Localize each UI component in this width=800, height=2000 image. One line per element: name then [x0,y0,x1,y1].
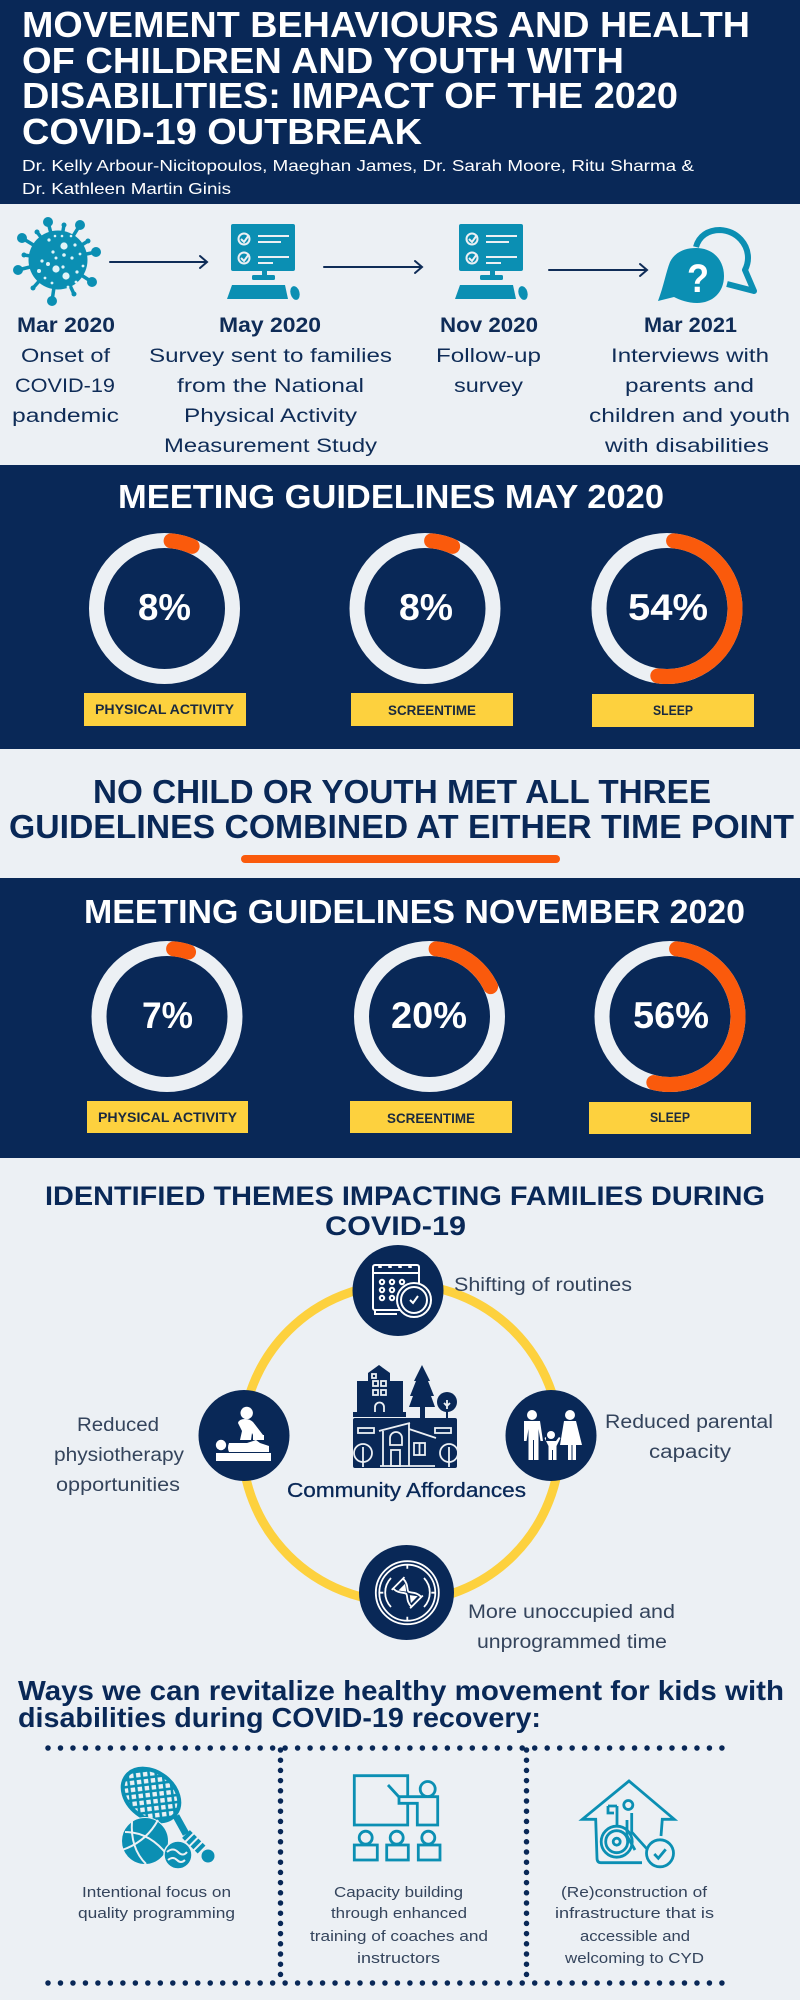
donut: physical activity 8%: 8% [138,587,191,628]
milestone: Mar 2021: children and youth [589,406,790,427]
label: sleep: SLEEP [653,703,693,718]
icon: follow-up computer [455,224,529,301]
donut: sleep 56%: 56% [633,995,709,1036]
milestone: Mar 2020: Onset of [21,346,111,367]
text: reconstruction: accessible and [580,1928,690,1945]
callout: no child met all guidelines [9,773,794,863]
milestone: May 2020: May 2020 [219,314,321,337]
text: capacity building: training of coaches and [310,1928,488,1945]
title [22,4,750,152]
callout: no child met all guidelines: NO CHILD OR YOUTH MET ALL THREE [93,773,711,810]
text: quality programming [78,1884,235,1922]
heading: disabilities during COVID-19 recovery: [18,1702,541,1733]
label: physical activity [87,1101,248,1133]
panel: meeting guidelines November 2020 [0,878,800,1158]
icon: virus [13,217,101,306]
donut: sleep 54% [592,534,742,683]
icon: classroom training [354,1776,440,1860]
donut: screentime 20%: 20% [391,995,467,1036]
title: COVID-19 OUTBREAK [22,111,422,152]
icon: question bubbles [658,230,754,303]
label: screentime: SCREENTIME [387,1111,475,1126]
label: sleep: SLEEP [650,1110,690,1125]
label: physical activity: PHYSICAL ACTIVITY [98,1110,237,1125]
icon: calendar and clock [352,1245,444,1336]
panel: identified themes [45,1181,773,1653]
title: MOVEMENT BEHAVIOURS AND HEALTH [22,4,750,45]
title: OF CHILDREN AND YOUTH WITH [22,40,624,81]
panel: header [0,0,800,204]
theme: reduced physiotherapy opportunities: physiotherapy [54,1445,185,1466]
icon: accessible house [582,1781,674,1867]
milestone: May 2020: Survey sent to families [149,346,392,367]
text: capacity building [310,1884,488,1967]
milestone: May 2020: from the National [177,376,364,397]
milestone: Mar 2020: Mar 2020 [17,314,115,337]
text: capacity building: through enhanced [331,1905,467,1922]
panel: meeting guidelines May 2020 [0,465,800,749]
text: quality programming: quality programming [78,1905,235,1922]
panel: ways to revitalize [18,1675,784,1983]
milestone: Mar 2021 [589,314,790,457]
arrow [110,256,207,268]
milestone: Nov 2020: Nov 2020 [440,314,538,337]
donut: screentime 20% [355,942,504,1091]
heading: COVID-19 [325,1211,466,1241]
theme: reduced parental capacity: Reduced parental [605,1412,773,1433]
label: physical activity [84,693,246,726]
authors: Dr. Kelly Arbour-Nicitopoulos, Maeghan James, Dr. Sarah Moore, Ritu Sharma & [22,158,694,175]
label: screentime: SCREENTIME [388,703,476,718]
donut: physical activity 7%: 7% [142,995,193,1036]
authors [22,158,694,198]
callout: no child met all guidelines: GUIDELINES COMBINED AT EITHER TIME POINT [9,808,794,845]
milestone: Mar 2020: COVID-19 [15,376,115,397]
dotted grid [48,1748,722,1983]
milestone: Mar 2021: Mar 2021 [644,314,737,337]
milestone: Nov 2020: survey [454,376,524,397]
text: capacity building: instructors [357,1950,440,1967]
milestone: Mar 2020: pandemic [12,406,119,427]
icon: sports equipment [112,1758,214,1869]
icon: physiotherapy [198,1390,290,1481]
icon: family [506,1390,596,1481]
donut: physical activity 7% [92,942,242,1091]
milestone: Mar 2021: with disabilities [604,436,769,457]
text: reconstruction [555,1884,714,1967]
donut: screentime 8%: 8% [399,587,453,628]
heading: IDENTIFIED THEMES IMPACTING FAMILIES DURING [45,1181,765,1211]
text: reconstruction: welcoming to CYD [564,1950,704,1967]
theme: reduced physiotherapy opportunities: opportunities [56,1475,180,1496]
milestone: Nov 2020 [436,314,541,397]
theme: reduced parental capacity [605,1412,773,1463]
milestone: May 2020: Physical Activity [184,406,358,427]
donut: physical activity 8% [90,534,239,683]
heading: MEETING GUIDELINES MAY 2020 [118,478,664,515]
milestone: May 2020: Measurement Study [164,436,378,457]
heading [18,1675,784,1733]
yellow cycle ring [242,1284,560,1602]
theme: shifting of routines: Shifting of routines [454,1275,632,1296]
heading [45,1181,765,1241]
donut: sleep 56% [595,942,745,1091]
icon: question bubbles: ? [687,257,709,301]
label: sleep [589,1102,751,1134]
label: sleep [592,694,754,727]
label: physical activity: PHYSICAL ACTIVITY [95,702,234,717]
donut: screentime 8% [350,534,500,683]
icon: hourglass clock [359,1545,454,1640]
theme: reduced physiotherapy opportunities: Reduced [77,1415,159,1436]
theme: unoccupied time: More unoccupied and [468,1602,675,1623]
theme: reduced parental capacity: capacity [649,1442,732,1463]
theme: unoccupied time: unprogrammed time [477,1632,667,1653]
panel: timeline [12,217,790,457]
authors: Dr. Kathleen Martin Ginis [22,181,231,198]
heading: MEETING GUIDELINES NOVEMBER 2020 [84,893,745,930]
heading: Ways we can revitalize healthy movement for kids with [18,1675,784,1706]
text: reconstruction: (Re)construction of [561,1884,708,1901]
label: screentime [350,1101,512,1133]
title: DISABILITIES: IMPACT OF THE 2020 [22,75,678,116]
text: quality programming: Intentional focus on [82,1884,231,1901]
arrow [324,261,422,273]
text: capacity building: Capacity building [334,1884,463,1901]
donut: sleep 54%: 54% [628,587,708,628]
icon: survey computer [227,224,301,301]
theme: reduced physiotherapy opportunities [54,1415,185,1496]
icon: community buildings [353,1365,458,1468]
milestone: May 2020 [149,314,392,457]
milestone: Mar 2020 [12,314,119,427]
label: community affordances: Community Affordances [287,1480,526,1502]
theme: unoccupied time [468,1602,675,1653]
milestone: Nov 2020: Follow-up [436,346,541,367]
label: screentime [351,693,513,726]
text: reconstruction: infrastructure that is [555,1905,714,1922]
milestone: Mar 2021: parents and [625,376,754,397]
arrow [549,264,647,276]
milestone: Mar 2021: Interviews with [611,346,769,367]
